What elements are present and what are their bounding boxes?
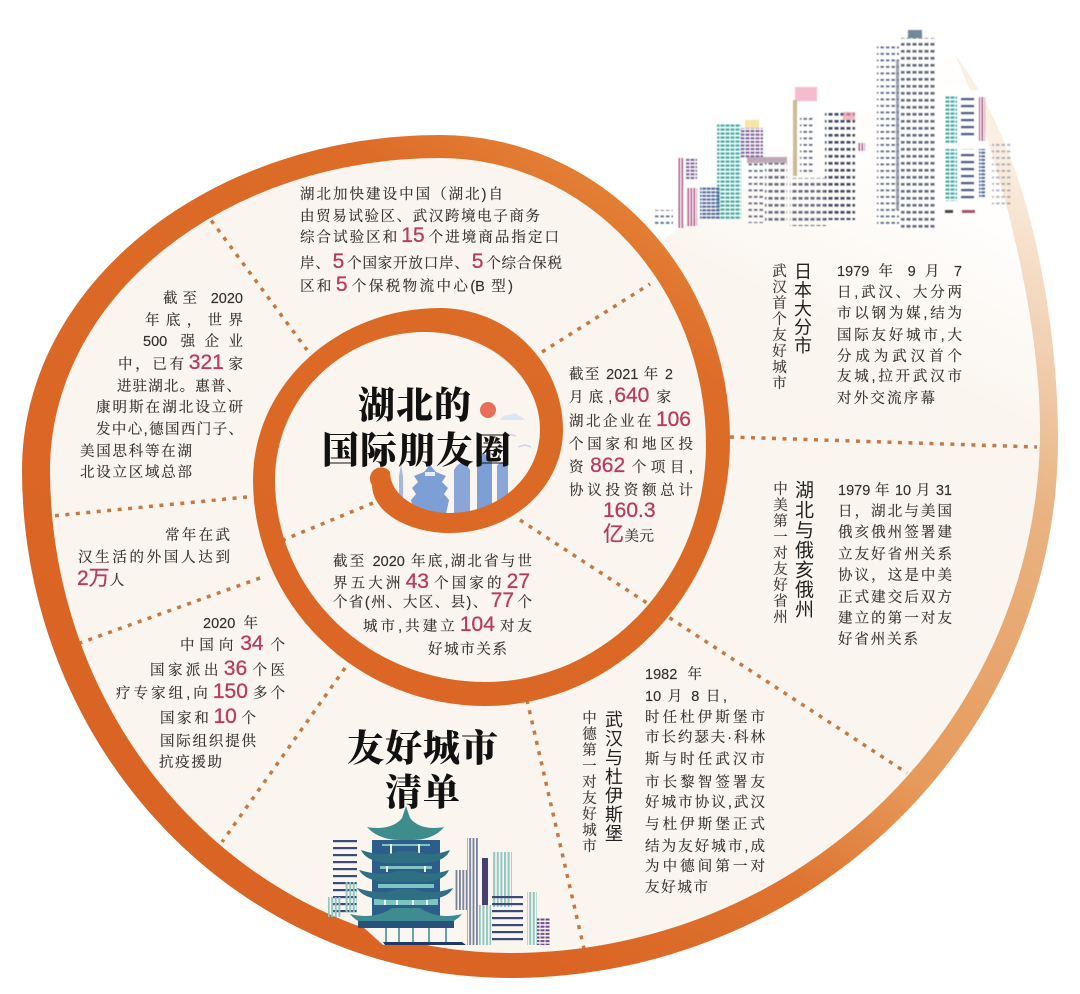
main title: 湖北的国际朋友圈: [322, 375, 512, 474]
text block: overseas investment: 160.3: [603, 499, 656, 522]
body text: 时任杜伊斯堡市: [645, 710, 765, 726]
body text: [838, 482, 952, 648]
friendship panel: 日本大分市: [769, 262, 962, 407]
main title: 湖北的国际朋友圈: 湖北的: [358, 375, 472, 429]
vertical heading: 日本大分市: [790, 262, 816, 355]
text block: foreign residents: 汉生活的外国人达到: [78, 550, 230, 566]
text block: overseas investment: [569, 366, 693, 548]
text block: overseas investment: 月底,640家: [569, 384, 671, 407]
body text: 10 月 8 日,: [645, 689, 727, 705]
text block: free trade zones: 综合试验区和15个进境商品指定口: [300, 224, 559, 247]
body text: 斯与时任武汉市: [645, 752, 765, 768]
vertical heading: 湖北与俄亥俄州: [791, 480, 818, 619]
body text: 俄亥俄州签署建: [838, 525, 952, 541]
spiral tail fading to the top right: [510, 55, 1058, 978]
vertical caption: 中美第一对友好省州: [770, 481, 791, 625]
body text: 分成为武汉首个: [837, 349, 962, 365]
text block: medical aid: 疗专家组,向150多个: [116, 680, 285, 703]
text block: sister cities total: [333, 553, 532, 658]
body text: 1979 年 10 月 31: [838, 483, 952, 499]
body text: 立友好省州关系: [838, 547, 952, 563]
vertical caption: 中德第一对友好城市: [579, 710, 600, 854]
text block: free trade zones: 湖北加快建设中国（湖北)自: [300, 187, 503, 203]
text block: free trade zones: [300, 186, 562, 296]
text block: Fortune 500: 康明斯在湖北设立研: [96, 400, 243, 416]
text block: overseas investment: 协议投资额总计: [569, 483, 693, 499]
body text: 友城,拉开武汉市: [837, 369, 962, 385]
text block: medical aid: 国际组织提供: [160, 734, 256, 750]
body text: 对外交流序幕: [837, 391, 935, 407]
text block: medical aid: 中国向34个: [180, 632, 285, 655]
body text: 结为友好城市,成: [645, 839, 765, 855]
text block: medical aid: 国家派出36个医: [150, 657, 285, 680]
friendship panel: 湖北与俄亥俄州: [770, 480, 952, 648]
text block: overseas investment: 资862个项目,: [569, 454, 693, 477]
body text: 协议，这是中美: [838, 568, 952, 584]
text block: overseas investment: 截至 2021 年 2: [569, 367, 673, 383]
icon: small blue skyline with sun inside the inner ring: [399, 402, 531, 516]
text block: Fortune 500: 进驻湖北。惠普、: [117, 379, 241, 395]
section title: 友好城市清单: [347, 718, 499, 816]
text block: sister cities total: 好城市关系: [428, 642, 507, 658]
text block: sister cities total: 城市,共建立104对友: [363, 613, 532, 636]
text block: medical aid: 2020 年: [203, 616, 258, 632]
section title: 友好城市清单: 友好城市: [347, 718, 499, 772]
large pagoda and city illustration: [328, 806, 550, 945]
text block: Fortune 500: 年底，世界: [145, 313, 243, 329]
body text: 市长黎智签署友: [645, 775, 765, 791]
body text: 好城市协议,武汉: [645, 795, 765, 811]
vertical caption: 武汉首个友好城市: [769, 263, 790, 391]
body text: 国际友好城市,大: [837, 328, 962, 344]
body text: 好省州关系: [838, 632, 918, 648]
text block: medical aid: [116, 615, 285, 771]
friendship panel: 武汉与杜伊斯堡: [579, 666, 765, 896]
body text: 与杜伊斯堡正式: [645, 817, 765, 833]
text block: Fortune 500: 北设立区域总部: [80, 465, 192, 481]
text block: sister cities total: 截至 2020 年底,湖北省与世: [333, 554, 532, 570]
main title: 湖北的国际朋友圈: 国际朋友圈: [322, 420, 512, 474]
body text: 1979 年 9 月 7: [837, 264, 962, 280]
text block: Fortune 500: 500 强企业: [143, 334, 243, 350]
body text: 建立的第一对友: [838, 611, 952, 627]
vertical heading: 武汉与杜伊斯堡: [601, 710, 627, 843]
body text: [837, 263, 962, 407]
section title: 友好城市清单: 清单: [385, 762, 461, 816]
text block: sister cities total: 界五大洲43个国家的27: [333, 570, 530, 593]
text block: overseas investment: 个国家和地区投: [569, 437, 693, 453]
text block: overseas investment: 亿美元: [603, 518, 654, 548]
body text: 正式建交后双方: [838, 590, 952, 606]
skyline illustration top right: [653, 30, 1012, 228]
body text: 为中德间第一对: [645, 859, 765, 875]
text block: medical aid: 抗疫援助: [159, 755, 222, 771]
body text: [645, 666, 765, 896]
text block: overseas investment: 湖北企业在106: [569, 408, 691, 431]
body text: 市以钢为媒,结为: [837, 306, 962, 322]
body text: 1982 年: [645, 667, 702, 683]
text block: foreign residents: [77, 527, 230, 590]
text block: Fortune 500: 美国思科等在湖: [80, 444, 192, 460]
text block: Fortune 500: 截至 2020: [163, 291, 243, 307]
body text: 友好城市: [645, 880, 708, 896]
body text: 市长约瑟夫·科林: [645, 730, 765, 746]
text block: sister cities total: 个省(州、大区、县)、77个: [333, 589, 532, 612]
text block: free trade zones: 区和5个保税物流中心(B 型): [300, 273, 513, 296]
text block: Fortune 500: [80, 290, 243, 481]
body text: 日，湖北与美国: [838, 504, 952, 520]
text block: Fortune 500: 发中心,德国西门子、: [96, 422, 243, 438]
divider dashed lines: [52, 212, 1037, 953]
text block: Fortune 500: 中，已有321家: [118, 351, 243, 374]
text block: free trade zones: 由贸易试验区、武汉跨境电子商务: [300, 209, 540, 225]
text block: medical aid: 国家和10个: [160, 705, 256, 728]
body text: 日,武汉、大分两: [837, 285, 962, 301]
text block: foreign residents: 2万人: [77, 567, 124, 590]
text block: foreign residents: 常年在武: [165, 528, 230, 544]
spiral band: [22, 135, 730, 978]
text block: free trade zones: 岸、5个国家开放口岸、5个综合保税: [300, 250, 562, 273]
